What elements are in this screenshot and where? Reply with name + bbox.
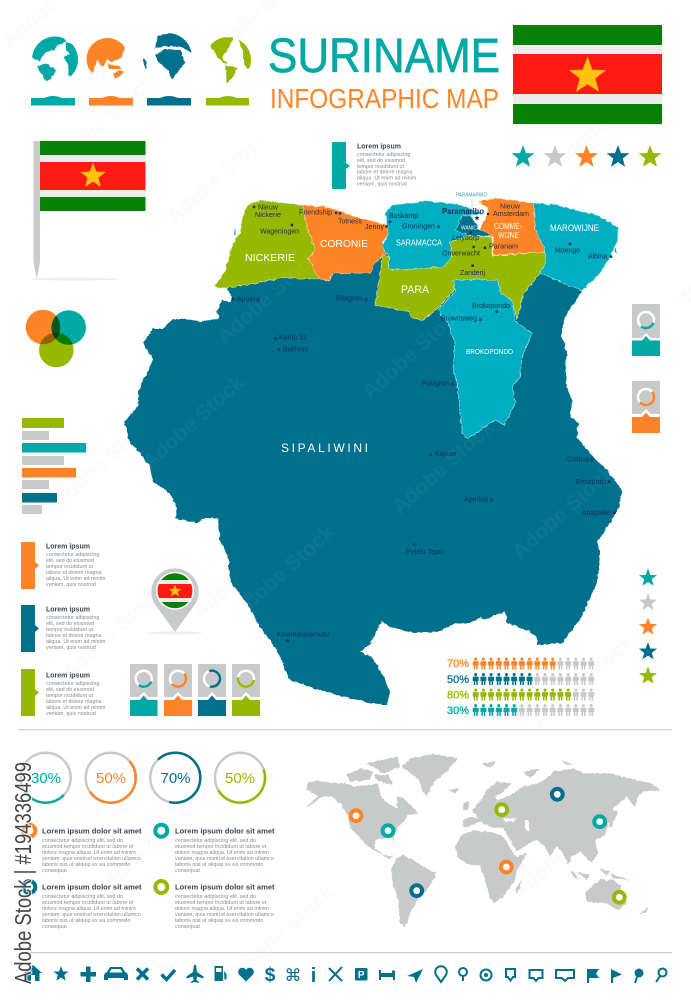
- info card: orange: [164, 664, 192, 716]
- info card: teal: [130, 664, 158, 716]
- bar chart: [22, 418, 86, 514]
- callout: orange: [21, 542, 106, 589]
- top callout: aliqua. Ut enim ad minim: [357, 176, 417, 182]
- region labels: [245, 221, 599, 455]
- callout: blue: tempor incididunt ut: [46, 627, 94, 633]
- region: Brokopondo: [438, 280, 532, 439]
- top callout: consectetur adipiscing: [357, 152, 410, 158]
- list item: blue: consequat: [42, 924, 67, 930]
- top callout: Lorem ipsum: [357, 144, 401, 150]
- callout: blue: labore et dolore magna: [46, 633, 101, 639]
- map of Suriname: [125, 192, 622, 705]
- region: Para: [375, 236, 546, 320]
- watermark: faint stock marks on paper: Adobe Stock: [228, 881, 339, 984]
- region labels: SARAMACCA: [396, 238, 443, 248]
- region labels: WANICA: [461, 226, 481, 232]
- city labels: Jenny: [365, 224, 384, 231]
- icon: lollipop: [634, 968, 644, 983]
- city labels: Kajana: [435, 451, 456, 458]
- title: SURINAME: [268, 30, 500, 83]
- watermark: faint stock marks on paper: Adobe Stock: [548, 71, 659, 174]
- donut: 50% green: 50%: [225, 770, 255, 787]
- city labels: Bakhuis: [283, 346, 309, 354]
- stars column right: [639, 568, 657, 684]
- icon: dollar: $: [265, 965, 276, 986]
- list item: blue: eiusmod tempor incididunt ut labore et: [42, 900, 134, 906]
- icon: bed: [379, 970, 395, 980]
- callout: blue: veniam, quis nostrud: [46, 645, 96, 651]
- icon: speech medium: [530, 970, 542, 981]
- callout: blue: elit, sed do eiusmod: [46, 621, 94, 627]
- watermark: faint stock marks on map: Adobe Stock: [213, 246, 324, 349]
- icon: cross: [137, 968, 148, 980]
- callout: orange: labore et dolore magna: [46, 570, 101, 576]
- icon: magnifier: [656, 968, 666, 982]
- percentage labels: 70%: [447, 658, 469, 670]
- list item: orange: consectetur adipiscing elit, sed do: [42, 838, 123, 844]
- donut: 70%: 70%: [160, 770, 191, 787]
- title: INFOGRAPHIC MAP: [270, 83, 499, 114]
- map markers: [351, 810, 361, 821]
- top callout: veniam, quis nostrud: [357, 182, 407, 188]
- list item: orange: veniam, quis nostrud exercitation ullamco: [42, 856, 141, 862]
- region labels: NICKERIE: [245, 252, 295, 264]
- donut: 30%: [10, 742, 81, 813]
- region labels: PARA: [401, 284, 430, 296]
- donut: 30%: 30%: [31, 770, 61, 787]
- callout: blue: Lorem ipsum: [46, 606, 90, 614]
- list item: teal: veniam, quis nostrud exercitation ullamco: [175, 856, 274, 862]
- city dots: [232, 206, 616, 642]
- icon: fuel: [214, 966, 226, 981]
- icon: check: [162, 970, 175, 980]
- top callout: [332, 142, 417, 189]
- icon: info: i: [311, 965, 316, 987]
- city labels: Cotica: [567, 456, 589, 464]
- city labels: Kamp 52: [279, 334, 307, 342]
- row: teal: [473, 704, 594, 716]
- watermark: faint stock marks on paper: Adobe Stock: [58, 581, 169, 684]
- side info card: orange: [632, 381, 660, 433]
- city labels: Amsterdam: [493, 211, 529, 218]
- info card: blue: [198, 664, 226, 716]
- region labels: MAROWIJNE: [550, 223, 599, 234]
- city labels: [237, 204, 611, 638]
- river mouth: [234, 230, 617, 254]
- stars row top: [512, 145, 661, 167]
- icon: car: [104, 967, 128, 980]
- list item: teal: dolore magna aliqua. Ut enim ad minim: [175, 850, 269, 856]
- icon: plane: [186, 965, 204, 983]
- region: Marowijne: [534, 203, 618, 291]
- list item: teal: consectetur adipiscing elit, sed do: [175, 838, 256, 844]
- list item: green: consectetur adipiscing elit, sed do: [175, 894, 256, 900]
- city labels: Kwamalasamutu: [277, 632, 329, 638]
- Paramaribo callout: [442, 192, 488, 220]
- callout: green: consectetur adipiscing: [46, 681, 99, 687]
- city labels: Brownsweg: [441, 316, 477, 322]
- city labels: Benzdorp: [576, 479, 606, 486]
- list item: blue: laboris nisi ut aliquip ex ea commodo: [42, 918, 130, 924]
- list item: green: veniam, quis nostrud exercitation ullamco: [175, 912, 274, 918]
- city labels: Friendship: [299, 210, 332, 216]
- top callout: elit, sed do eiusmod: [357, 158, 405, 164]
- icon row: [24, 965, 666, 987]
- callout: green: labore et dolore magna: [46, 699, 101, 705]
- icon: pennant: [611, 969, 622, 983]
- Paramaribo callout: Paramaribo: [442, 206, 484, 216]
- region: Nickerie: [215, 200, 320, 288]
- list item: green: laboris nisi ut aliquip ex ea commodo: [175, 918, 263, 924]
- region shapes: [125, 198, 622, 705]
- callout: orange: tempor incididunt ut: [46, 564, 94, 570]
- region: Coronie: [302, 205, 390, 281]
- city labels: Apetina: [464, 496, 488, 504]
- list item: orange: consequat: [42, 868, 67, 874]
- top callout: labore et dolore magna: [357, 170, 412, 176]
- list item: green: eiusmod tempor incididunt ut labore et: [175, 900, 267, 906]
- icon: pin: [435, 966, 447, 982]
- list item: blue: consectetur adipiscing elit, sed do: [42, 894, 123, 900]
- pole flag: [30, 141, 146, 280]
- percentage labels: 80%: [447, 690, 469, 702]
- city labels: Lelydorp: [452, 235, 479, 242]
- region: Saramacca: [382, 201, 483, 270]
- list item: teal: Lorem ipsum dolor sit amet: [175, 826, 275, 835]
- title: [268, 30, 500, 114]
- city labels: Paranam: [489, 244, 518, 250]
- callout: orange: consectetur adipiscing: [46, 552, 99, 558]
- icon: target pin: [480, 970, 492, 980]
- callout: orange: veniam, quis nostrud: [46, 582, 96, 588]
- row: blue: [473, 673, 594, 685]
- stock id label: Adobe Stock | #194336499: [10, 762, 36, 984]
- percentage labels: 30%: [447, 705, 469, 717]
- list item: teal: [155, 825, 275, 874]
- icon: home: [24, 965, 42, 981]
- callout: green: [21, 669, 106, 717]
- city labels: Pokigron: [422, 380, 449, 388]
- icon: navigation arrow: [407, 969, 423, 983]
- globe: green: [206, 35, 252, 106]
- watermark: faint stock marks on paper: Adobe Stock: [88, 801, 199, 904]
- top callout: tempor incididunt ut: [357, 164, 405, 170]
- callout: orange: elit, sed do eiusmod: [46, 558, 94, 564]
- city labels: Boskamp: [389, 213, 418, 220]
- city labels: Bitagron: [336, 296, 362, 302]
- region: Commewijne: [478, 198, 545, 255]
- people pictogram chart: [447, 658, 594, 717]
- list item: orange: [23, 825, 142, 874]
- icon: plus: [80, 966, 96, 982]
- region labels: BROKOPONDO: [466, 349, 514, 356]
- list item: orange: Lorem ipsum dolor sit amet: [42, 826, 142, 835]
- city labels: Moengo: [555, 248, 580, 254]
- callout: green: aliqua. Ut enim ad minim: [46, 705, 106, 711]
- city labels: Nieuw: [258, 204, 279, 212]
- watermark: faint stock marks on map: Adobe Stock: [228, 521, 339, 624]
- list item: green: consequat: [175, 924, 200, 930]
- callout: orange: aliqua. Ut enim ad minim: [46, 576, 106, 582]
- list item: teal: consequat: [175, 868, 200, 874]
- icon: cutlery: [329, 967, 342, 981]
- donut: 50%: 50%: [96, 770, 126, 787]
- region: Sipaliwini: [125, 250, 622, 705]
- globe: teal: [31, 36, 78, 106]
- watermark: faint stock marks on paper: Adobe Stock: [48, 71, 159, 174]
- continents: [305, 754, 660, 927]
- watermark: faint stock marks on paper: Adobe Stock: [528, 631, 639, 734]
- callout: green: elit, sed do eiusmod: [46, 687, 94, 693]
- callout: blue: [21, 605, 106, 652]
- icon: speech small: [506, 969, 515, 980]
- percentage labels: 50%: [447, 674, 469, 686]
- donut: 50%: [75, 742, 146, 813]
- city labels: Totness: [338, 218, 362, 226]
- watermark: faint stock marks on map: Adobe Stock: [138, 371, 249, 474]
- city labels: Zanderij: [460, 270, 485, 277]
- side info card: teal: [632, 304, 660, 356]
- watermark: faint stock marks on paper: Adobe Stock: [163, 126, 274, 229]
- region labels: SIPALIWINI: [281, 441, 368, 455]
- region labels: WIJNE: [498, 230, 519, 240]
- city labels: Onverwacht: [442, 250, 480, 258]
- watermark: faint stock marks on map: Adobe Stock: [388, 416, 499, 519]
- city labels: Nickerie: [255, 212, 281, 219]
- row: orange: [473, 658, 594, 670]
- donut: 50% green: [208, 746, 272, 809]
- big flag: [513, 25, 662, 124]
- globe: blue: [142, 32, 194, 106]
- list item: blue: veniam, quis nostrud exercitation ullamco: [42, 912, 141, 918]
- city labels: Wageningen: [260, 228, 299, 236]
- callout: orange: Lorem ipsum: [46, 544, 90, 550]
- list item: green: Lorem ipsum dolor sit amet: [175, 883, 275, 892]
- icon: star: [53, 966, 69, 980]
- region: Wanica: [455, 215, 493, 236]
- icon: speech wide: [556, 970, 574, 981]
- list item: teal: eiusmod tempor incididunt ut labore et: [175, 844, 267, 850]
- watermark: faint stock marks on map: [138, 246, 619, 624]
- watermark: faint stock marks on map: Adobe Stock: [508, 461, 619, 564]
- watermark: faint stock marks on map: Adobe Stock: [358, 301, 469, 404]
- city labels: Apoera: [237, 296, 260, 304]
- callout: green: tempor incididunt ut: [46, 693, 94, 699]
- Paramaribo callout: PARAMARIBO: [456, 192, 488, 198]
- map pin with flag: [148, 568, 202, 634]
- watermark: faint stock marks on paper: Adobe Stock: [188, 521, 299, 624]
- callout: green: veniam, quis nostrud: [46, 711, 96, 717]
- region labels: COMME-: [494, 221, 522, 231]
- globe: orange: [84, 35, 133, 106]
- callout: blue: consectetur adipiscing: [46, 615, 99, 621]
- list item: green: [155, 881, 275, 930]
- icon: parking: [355, 968, 368, 981]
- city labels: Pelelu Tepu: [406, 549, 443, 556]
- list item: blue: Lorem ipsum dolor sit amet: [42, 883, 142, 892]
- watermark: faint stock marks on paper: Adobe Stock: [508, 801, 619, 904]
- icon: heart: [238, 968, 254, 982]
- list item: orange: dolore magna aliqua. Ut enim ad minim: [42, 850, 136, 856]
- city labels: Nieuw: [500, 204, 521, 210]
- list item: teal: laboris nisi ut aliquip ex ea commodo: [175, 862, 263, 868]
- row: green: [473, 688, 594, 700]
- list item: blue: [23, 881, 142, 930]
- region labels: CORONIE: [320, 238, 368, 250]
- city labels: Albina: [588, 254, 607, 260]
- icon: small pin: [459, 968, 467, 981]
- city labels: Anapaike: [582, 510, 611, 517]
- list item: orange: eiusmod tempor incididunt ut labore et: [42, 844, 134, 850]
- donut: 70%: [140, 742, 211, 813]
- list item: orange: laboris nisi ut aliquip ex ea commodo: [42, 862, 130, 868]
- callout: blue: aliqua. Ut enim ad minim: [46, 639, 106, 645]
- icon: flag: [587, 969, 599, 983]
- percentage labels: [447, 658, 469, 717]
- list item: green: dolore magna aliqua. Ut enim ad minim: [175, 906, 269, 912]
- icon: parking: P: [358, 970, 365, 981]
- city labels: Brokopondo: [472, 303, 510, 310]
- city labels: Groningen: [402, 224, 435, 230]
- globe icons row: [28, 32, 252, 106]
- callout: green: Lorem ipsum: [46, 672, 90, 680]
- icon: command: ⌘: [284, 966, 302, 986]
- list item: blue: dolore magna aliqua. Ut enim ad minim: [42, 906, 136, 912]
- watermark: faint stock marks on paper: Adobe Stock: [48, 411, 159, 514]
- venn diagram: [26, 310, 86, 367]
- info card: green: [232, 664, 260, 716]
- world map: [305, 754, 660, 927]
